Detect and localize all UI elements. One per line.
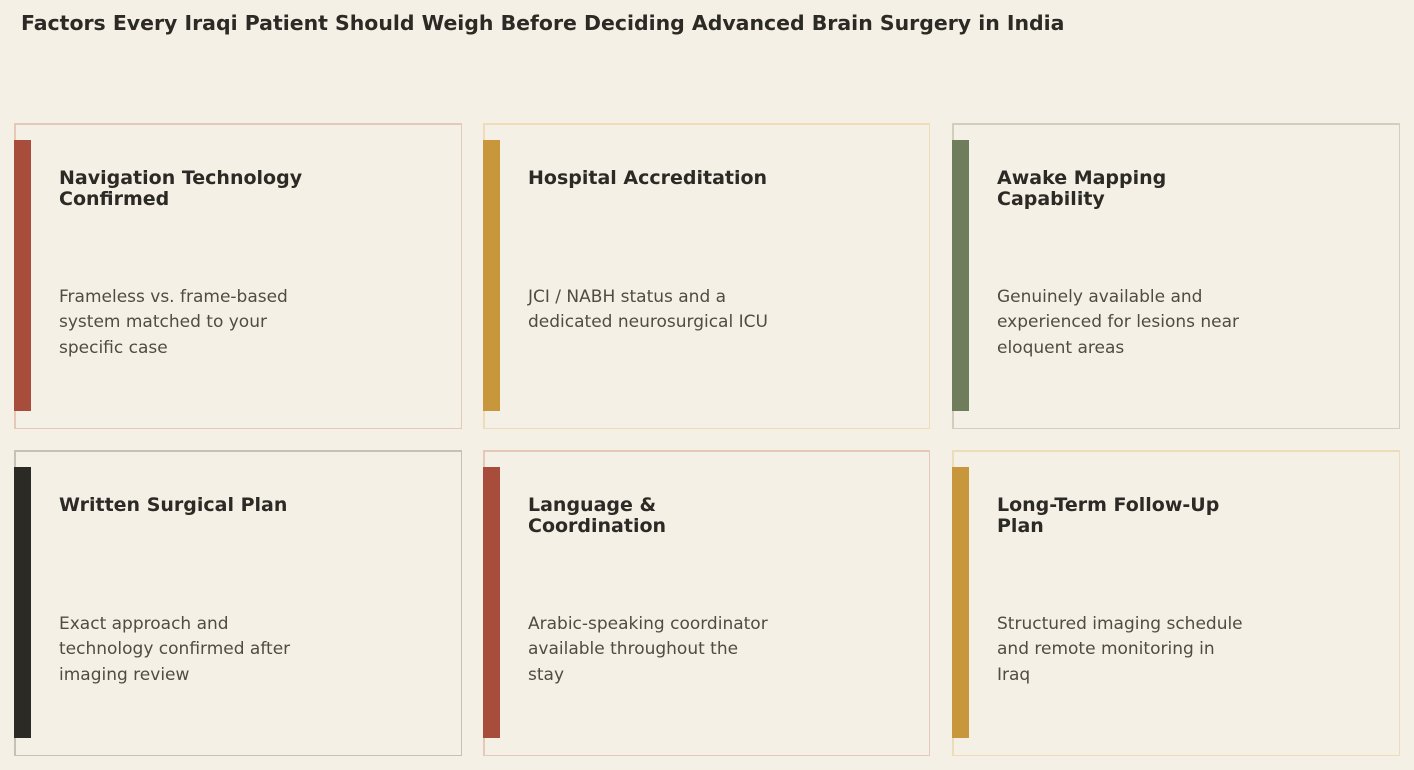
text: awake mapping: experienced for lesions near <box>997 312 1239 332</box>
text: language and coordination: available throughout the <box>528 639 738 659</box>
heading: navigation technology <box>59 167 302 210</box>
heading: language and coordination <box>528 494 666 537</box>
text: navigation technology: Frameless vs. frame-based <box>59 287 288 307</box>
text: hospital accreditation: JCI / NABH status and a <box>528 287 726 307</box>
text: navigation technology: specific case <box>59 338 168 358</box>
text: awake mapping: Genuinely available and <box>997 287 1202 307</box>
panel: written surgical plan <box>14 450 462 756</box>
text: awake mapping: eloquent areas <box>997 338 1124 358</box>
text: language and coordination <box>528 614 768 685</box>
text: written surgical plan: technology confirmed after <box>59 639 290 659</box>
text: written surgical plan: Exact approach and <box>59 614 229 634</box>
text: awake mapping <box>997 287 1239 358</box>
text: written surgical plan: imaging review <box>59 665 189 685</box>
heading: awake mapping: Capability <box>997 188 1105 210</box>
heading: language and coordination: Coordination <box>528 515 666 537</box>
text: long-term follow-up: Iraq <box>997 665 1030 685</box>
title: Factors Every Iraqi Patient Should Weigh Before Deciding Advanced Brain Surgery in India <box>21 11 1064 35</box>
text: language and coordination: Arabic-speaking coordinator <box>528 614 768 634</box>
heading: navigation technology: Navigation Technology <box>59 167 302 189</box>
text: hospital accreditation <box>527 287 768 332</box>
heading: language and coordination: Language & <box>528 494 656 516</box>
panel: hospital accreditation <box>483 123 930 429</box>
text: long-term follow-up <box>997 614 1243 685</box>
text: written surgical plan <box>59 614 290 685</box>
text: navigation technology: system matched to your <box>59 312 267 332</box>
heading: long-term follow-up <box>997 494 1219 537</box>
text: language and coordination: stay <box>528 665 564 685</box>
panel: navigation technology <box>14 123 462 429</box>
text: long-term follow-up: Structured imaging schedule <box>997 614 1243 634</box>
heading: navigation technology: Confirmed <box>59 188 169 210</box>
heading: written surgical plan: Written Surgical Plan <box>59 494 287 516</box>
heading: long-term follow-up: Plan <box>997 515 1044 537</box>
heading: long-term follow-up: Long-Term Follow-Up <box>997 494 1219 516</box>
heading: awake mapping: Awake Mapping <box>997 167 1166 189</box>
panel: language and coordination <box>483 450 930 756</box>
panel: awake mapping <box>952 123 1400 429</box>
panel: long-term follow-up <box>952 450 1400 756</box>
text: long-term follow-up: and remote monitoring in <box>997 639 1215 659</box>
text: hospital accreditation: dedicated neurosurgical ICU <box>528 312 768 332</box>
heading: hospital accreditation: Hospital Accreditation <box>528 167 767 189</box>
heading: awake mapping <box>997 167 1166 210</box>
text: navigation technology <box>59 287 288 358</box>
